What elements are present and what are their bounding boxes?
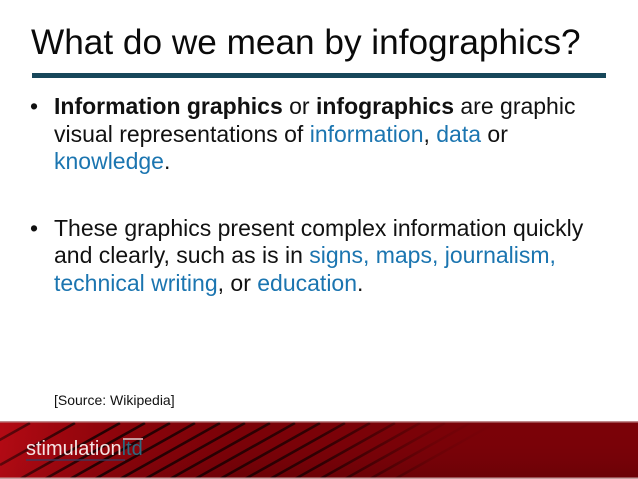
- bullet block: uses: technical writing, or education.: [54, 270, 363, 296]
- bullet block: definition: [30, 93, 575, 174]
- bullet block: definition: knowledge.: [54, 148, 170, 174]
- bullet block: uses: [30, 215, 584, 296]
- logo: stimulationltd: [26, 438, 143, 460]
- bullet block: definition: •: [30, 93, 38, 119]
- bullet block: uses: •: [30, 215, 38, 241]
- bullet block: uses: and clearly, such as is in signs, maps, journalism,: [54, 242, 556, 268]
- bullet block: uses: These graphics present complex information quickly: [54, 215, 583, 241]
- bullet block: definition: Information graphics or infographics are graphic: [54, 93, 575, 119]
- source note: [Source: Wikipedia]: [54, 392, 175, 408]
- bullet block: definition: visual representations of information, data or: [54, 121, 508, 147]
- title rule: [32, 73, 606, 78]
- title: What do we mean by infographics?: [31, 23, 581, 62]
- footer band: [0, 421, 638, 479]
